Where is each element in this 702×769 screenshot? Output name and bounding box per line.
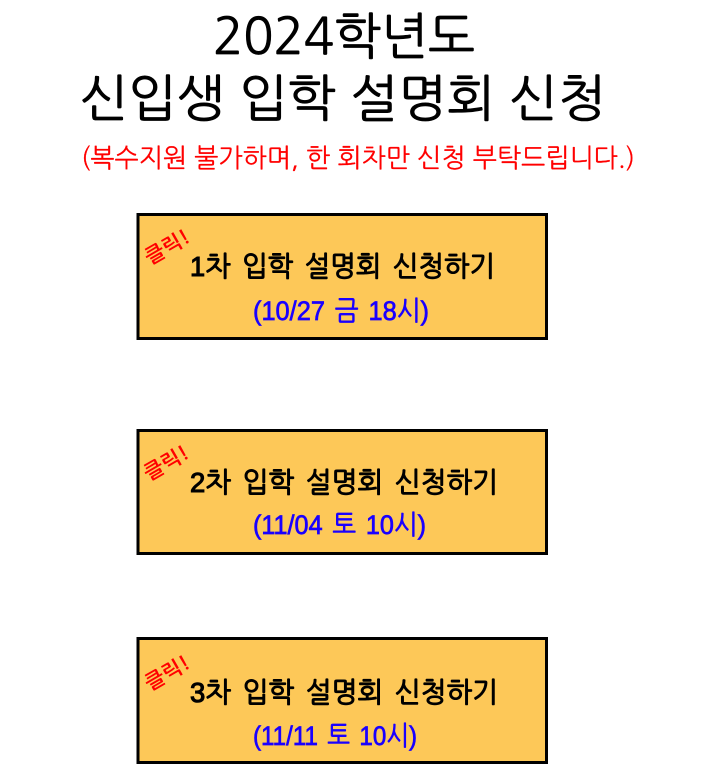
notice text: (복수지원 불가하며, 한 회차만 신청 부탁드립니다.) (81, 145, 635, 171)
button label 3: 3차 입학 설명회 신청하기 (190, 677, 498, 708)
panel: session 3 button (138, 638, 546, 762)
title: 2024학년도 (213, 12, 475, 62)
panel: session 1 button (138, 214, 546, 338)
panel: session 2 button (138, 430, 546, 554)
click badge 1: 클릭! (142, 226, 193, 268)
date 2: (11/04 토 10시) (253, 510, 426, 540)
date 3: (11/11 토 10시) (253, 721, 417, 751)
click badge 2: 클릭! (140, 442, 192, 484)
date 1: (10/27 금 18시) (253, 296, 429, 326)
title (80, 12, 606, 124)
title: 신입생 입학 설명회 신청 (80, 74, 606, 124)
button label 2: 2차 입학 설명회 신청하기 (190, 467, 498, 498)
click badge 3: 클릭! (142, 652, 193, 694)
button label 1: 1차 입학 설명회 신청하기 (190, 251, 495, 282)
